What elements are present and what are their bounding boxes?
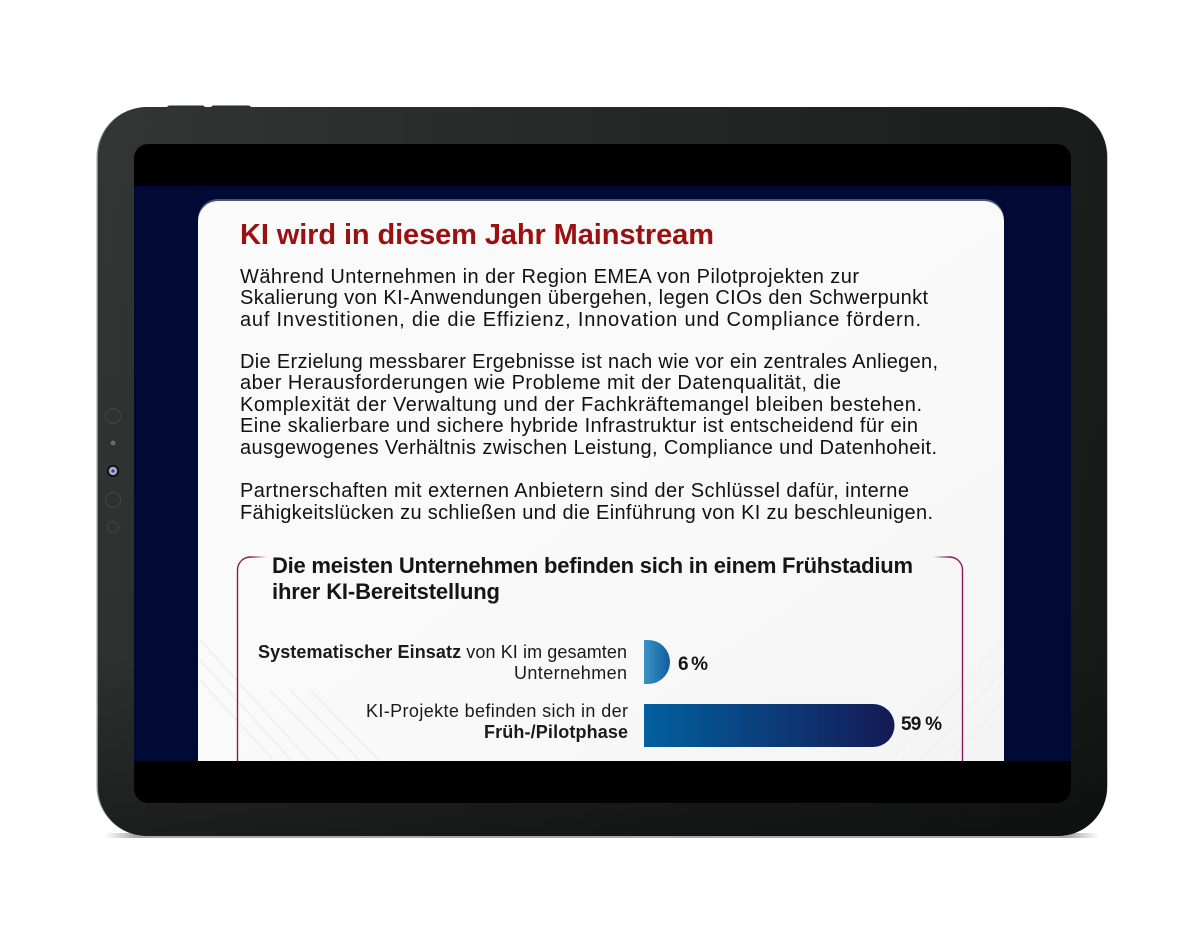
paragraph 2: Die Erzielung messbarer Ergebnisse ist nach wie vor ein zentrales Anliegen, xyxy=(240,351,938,373)
chart panel frame xyxy=(238,557,962,761)
chart heading: Die meisten Unternehmen befinden sich in einem Frühstadium xyxy=(272,553,913,578)
value: 59 % xyxy=(901,714,942,735)
paragraph 2: Eine skalierbare und sichere hybride Infrastruktur ist entscheidend für ein xyxy=(240,415,918,437)
paragraph 2: aber Herausforderungen wie Probleme mit der Datenqualität, die xyxy=(240,372,841,394)
bar row: pilot phase 59% xyxy=(366,701,942,747)
paragraph 1: Skalierung von KI-Anwendungen übergehen, legen CIOs den Schwerpunkt xyxy=(240,287,928,309)
label: Systematischer Einsatz von KI im gesamten xyxy=(258,642,627,662)
paragraph 2: ausgewogenes Verhältnis zwischen Leistung, Compliance und Datenhoheit. xyxy=(240,437,937,459)
device frame xyxy=(96,107,1108,836)
screen xyxy=(134,144,1071,803)
value: 6 % xyxy=(678,654,708,675)
chart heading xyxy=(272,553,913,604)
paragraph 3: Fähigkeitslücken zu schließen und die Einführung von KI zu beschleunigen. xyxy=(240,502,933,524)
label: KI-Projekte befinden sich in der xyxy=(366,701,628,721)
side buttons xyxy=(167,106,251,110)
device shadow xyxy=(104,833,1100,838)
label xyxy=(366,701,628,742)
bar xyxy=(644,704,894,747)
paragraph 2 xyxy=(240,351,938,459)
navy background band xyxy=(134,186,1071,761)
label: Unternehmen xyxy=(514,663,627,683)
card texture xyxy=(200,640,380,761)
paragraph 3 xyxy=(240,480,933,524)
paragraph 1: Während Unternehmen in der Region EMEA von Pilotprojekten zur xyxy=(240,266,859,288)
chart heading: ihrer KI-Bereitstellung xyxy=(272,579,500,604)
paragraph 2: Komplexität der Verwaltung und der Fachkräftemangel bleiben bestehen. xyxy=(240,394,922,416)
label: Früh-/Pilotphase xyxy=(484,722,628,742)
title: KI wird in diesem Jahr Mainstream xyxy=(240,219,714,251)
paragraph 3: Partnerschaften mit externen Anbietern sind der Schlüssel dafür, interne xyxy=(240,480,909,502)
paragraph 1 xyxy=(240,266,928,331)
tablet device xyxy=(96,106,1108,838)
bar xyxy=(644,640,670,684)
camera and sensors xyxy=(106,408,120,532)
bar row: systematic use 6% xyxy=(258,640,708,684)
white card xyxy=(198,199,1004,761)
paragraph 1: auf Investitionen, die die Effizienz, Innovation und Compliance fördern. xyxy=(240,309,921,331)
label xyxy=(258,642,627,683)
